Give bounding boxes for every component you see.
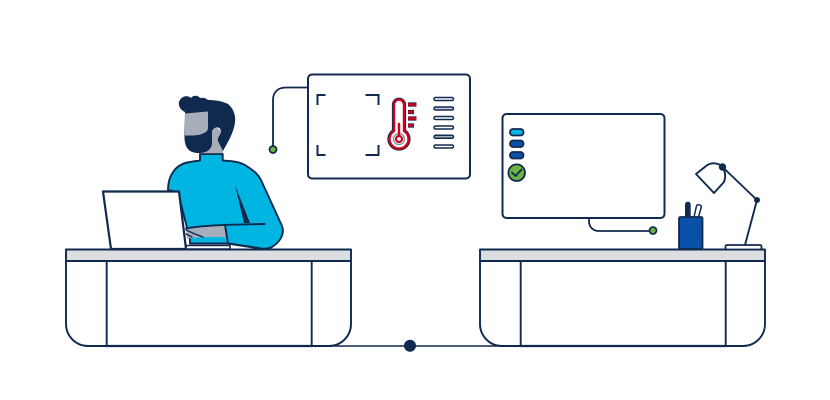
trackpad edge — [186, 246, 230, 249]
icon: check mark — [508, 164, 525, 181]
status pill: cyan — [510, 129, 524, 136]
callout: thermal camera panel — [270, 74, 470, 178]
status pill: blue — [510, 152, 524, 158]
node: centre connector — [404, 340, 416, 352]
pen: dark — [685, 202, 691, 217]
pencil: outline — [694, 205, 701, 217]
monitor panel — [502, 114, 664, 234]
connecting line between desks — [330, 345, 500, 347]
node: green dot — [650, 227, 656, 234]
pen holder — [679, 202, 702, 249]
collar — [200, 153, 223, 155]
cuff — [225, 225, 259, 248]
shade — [696, 163, 725, 193]
joint: elbow — [754, 197, 760, 203]
hair and beard — [179, 96, 235, 153]
person at desk — [103, 96, 283, 249]
face — [185, 112, 208, 136]
viewfinder brackets — [318, 95, 378, 155]
desk lamp — [696, 163, 762, 250]
connector — [589, 218, 652, 231]
arm — [722, 167, 757, 245]
desk: right — [480, 250, 765, 346]
panel frame — [308, 74, 470, 178]
forearm line — [186, 224, 264, 228]
joint: top — [719, 163, 726, 171]
status pill: blue — [510, 140, 524, 147]
node: green dot — [270, 146, 276, 153]
screen — [502, 114, 664, 218]
cup — [679, 217, 702, 249]
list bars — [434, 98, 454, 148]
sleeve fold — [235, 185, 250, 223]
laptop — [103, 192, 186, 249]
connector — [273, 88, 308, 149]
neck — [200, 127, 223, 154]
desk: left — [66, 250, 351, 346]
base — [726, 245, 762, 250]
hand — [186, 226, 227, 238]
finger lines — [186, 230, 203, 237]
icon: thermometer — [390, 100, 416, 149]
torso: blue sweater — [168, 154, 283, 249]
